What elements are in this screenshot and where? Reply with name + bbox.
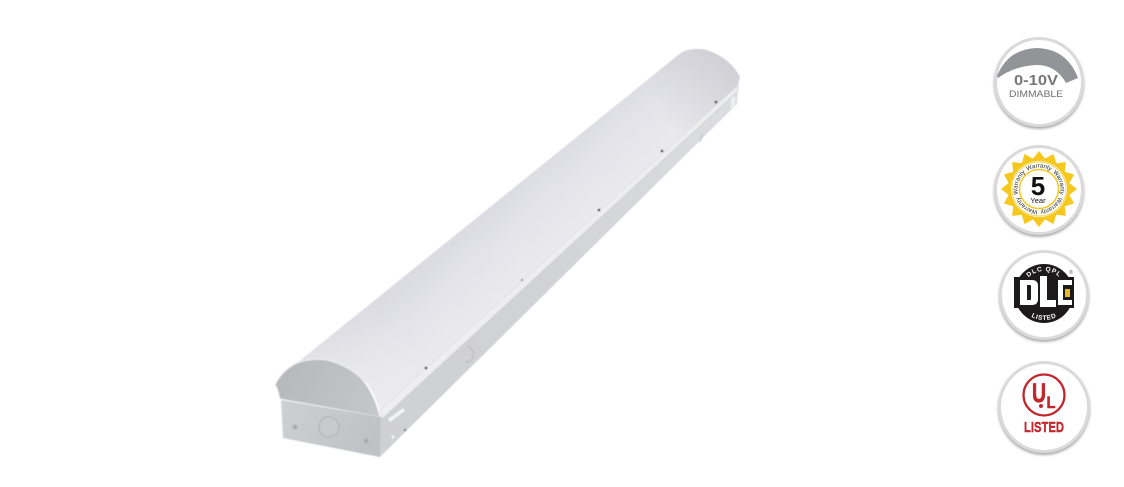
badge: UL listed bbox=[998, 361, 1090, 455]
side details bbox=[388, 408, 405, 422]
warranty ring text: Warranty bbox=[1054, 170, 1064, 195]
letter U: U bbox=[1032, 378, 1046, 408]
fixture lens bbox=[297, 49, 740, 410]
number 5: 5 bbox=[1031, 171, 1045, 201]
knockout circle bbox=[319, 417, 339, 437]
product: LED strip light fixture bbox=[275, 49, 740, 457]
dimmer arc icon bbox=[997, 48, 1078, 83]
fixture front box bbox=[281, 400, 381, 457]
DLC letters bbox=[1020, 280, 1038, 305]
warranty ring text bbox=[1013, 164, 1064, 215]
UL circle logo bbox=[1024, 374, 1064, 416]
DLC ring text: DLC QPL bbox=[1026, 266, 1060, 277]
registered mark: ® bbox=[1069, 269, 1073, 276]
letter L: L bbox=[1046, 393, 1056, 412]
warranty ring text: Warranty bbox=[1013, 170, 1025, 195]
fixture end cap bbox=[275, 359, 380, 417]
warranty ring text: Warranty bbox=[1026, 164, 1052, 171]
warranty seal bbox=[1001, 151, 1077, 227]
year text: Year bbox=[1030, 196, 1046, 205]
warranty ring text: Warranty bbox=[1016, 198, 1037, 215]
warranty ring text: Warranty bbox=[1040, 198, 1063, 214]
badge: DLC QPL listed bbox=[998, 250, 1090, 344]
fixture side panel bbox=[380, 88, 738, 457]
badge: 0-10V dimmable bbox=[994, 37, 1084, 129]
listed text: LISTED bbox=[1024, 419, 1064, 436]
0-10V text: 0-10V bbox=[1014, 73, 1058, 89]
DLC seal bbox=[1014, 264, 1074, 323]
dimmable text: DIMMABLE bbox=[1009, 89, 1063, 100]
fixture rail bbox=[380, 85, 738, 419]
badge: DLC QPL listed: LISTED bbox=[1032, 313, 1056, 320]
badge: 5 year warranty bbox=[992, 145, 1086, 238]
